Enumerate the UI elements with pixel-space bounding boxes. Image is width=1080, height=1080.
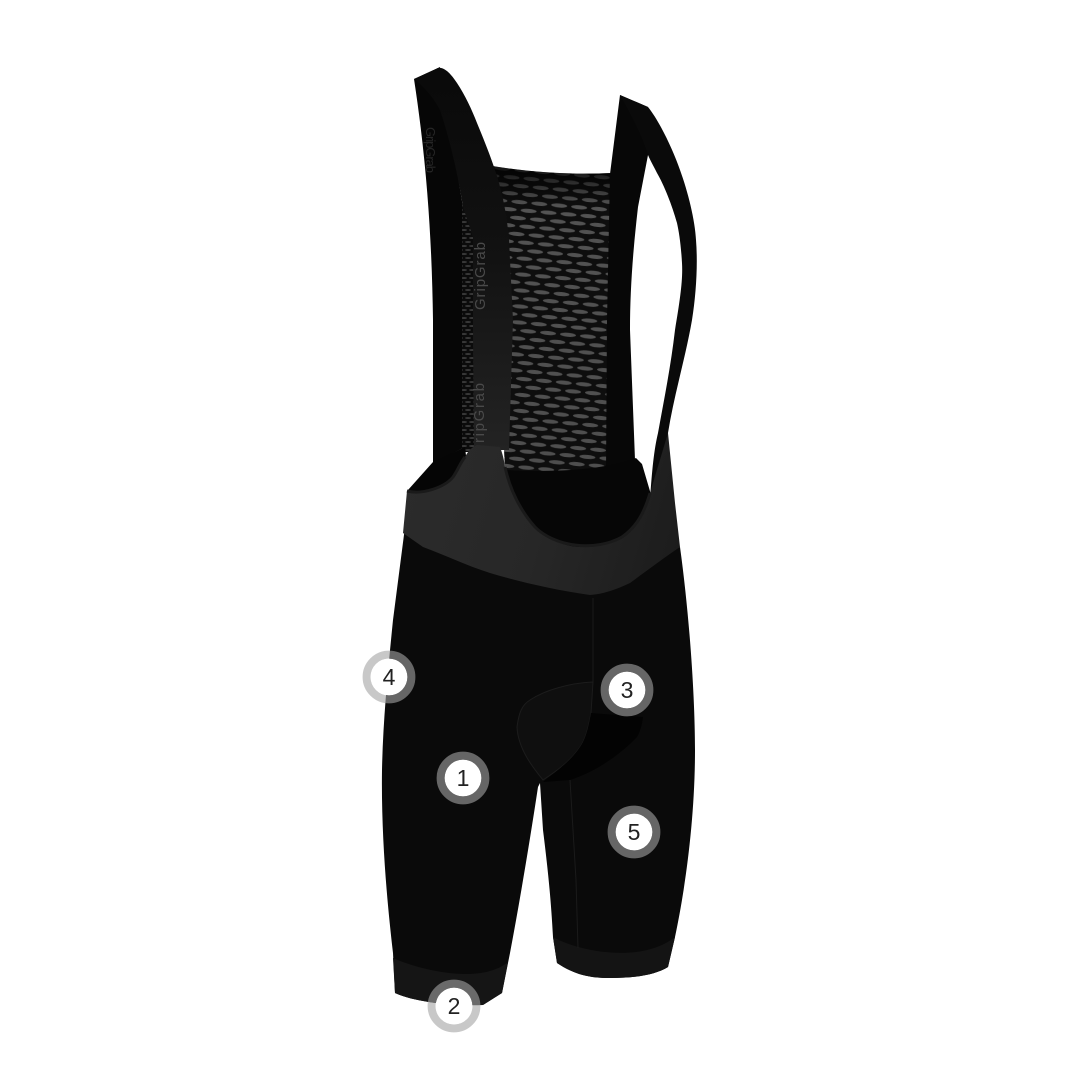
- chest opening lining: [506, 458, 652, 570]
- inner leg shadow: [543, 713, 643, 782]
- left side mesh strip: [462, 207, 476, 452]
- marker 4: 4: [383, 664, 396, 690]
- strap brand text upper: GripGrab: [423, 127, 438, 173]
- left leg cuff: [393, 958, 508, 1005]
- waistband: [403, 433, 680, 595]
- strap brand text lower: ripGrab: [471, 383, 488, 443]
- chamois pad: [517, 682, 593, 780]
- marker 2: 2: [448, 993, 460, 1019]
- marker 1: [441, 756, 485, 800]
- marker 1: 1: [457, 765, 469, 791]
- marker 5: 5: [628, 819, 640, 845]
- marker 5: [612, 810, 656, 854]
- strap brand text middle: GripGrab: [472, 242, 489, 310]
- shorts body and legs: [382, 527, 695, 1005]
- centre mesh back panel: [492, 166, 612, 472]
- right leg cuff: [553, 937, 675, 978]
- right outer strap: [620, 95, 697, 500]
- marker 2: [432, 984, 476, 1028]
- left under-arm lining: [408, 447, 470, 495]
- body seams: [570, 598, 593, 948]
- marker 4: [367, 655, 411, 699]
- marker 3: 3: [621, 677, 633, 703]
- strap piping: [407, 457, 650, 546]
- marker 3: [605, 668, 649, 712]
- left strap front band: [414, 68, 513, 450]
- left strap back layer: [414, 67, 465, 463]
- right inner strap band: [606, 95, 648, 474]
